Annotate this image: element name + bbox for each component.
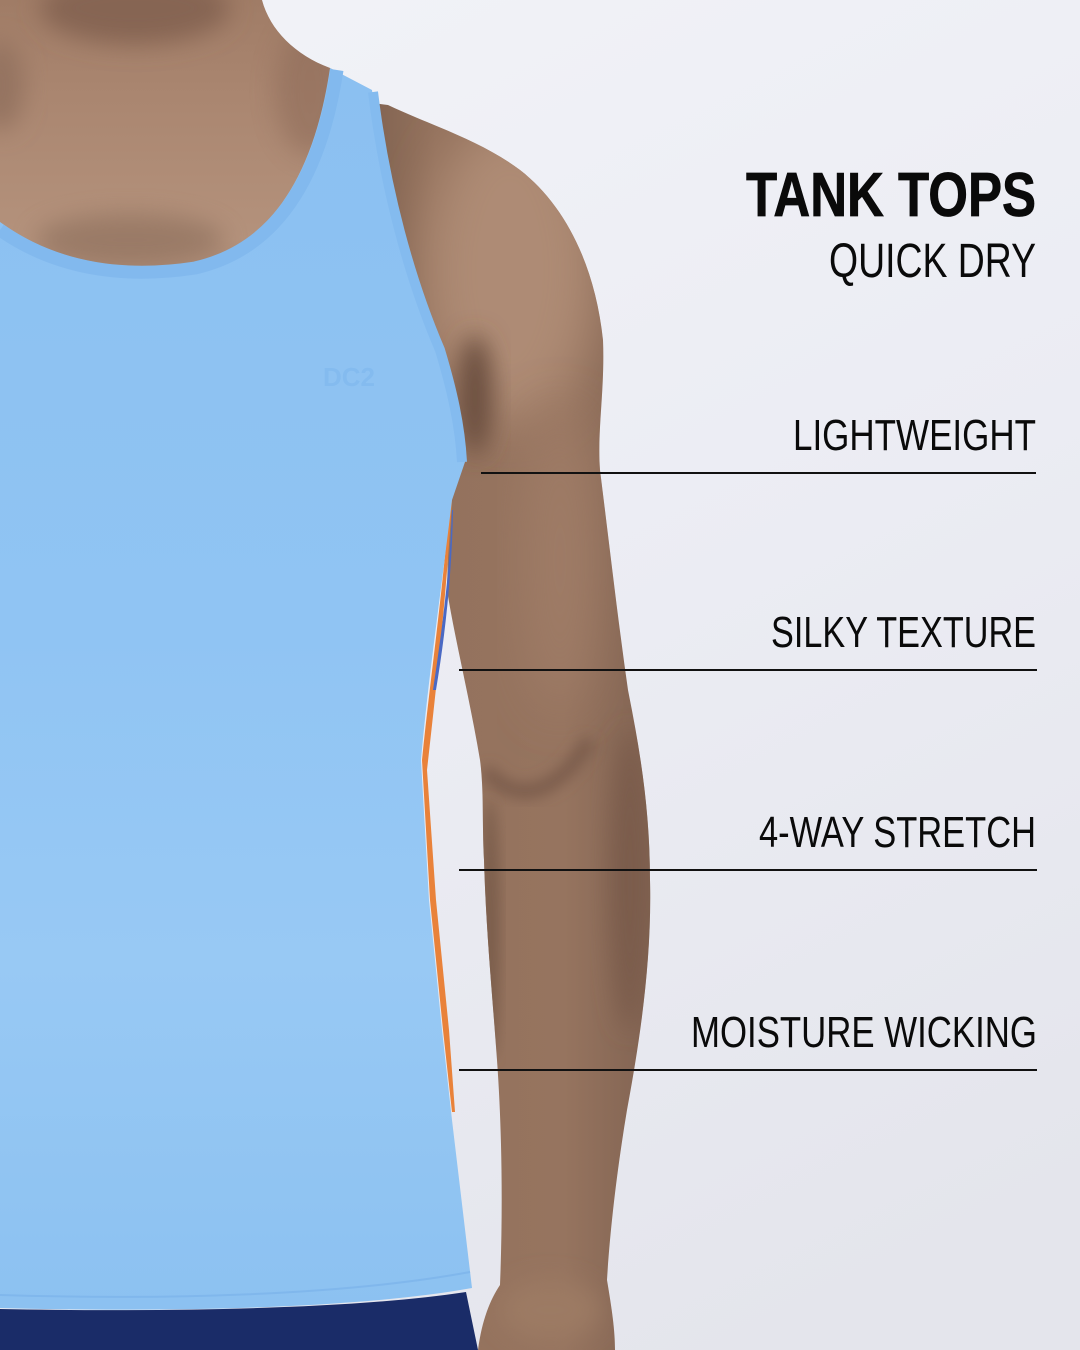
hem line — [0, 1272, 470, 1297]
arm and shoulder — [380, 104, 650, 1350]
armhole binding — [373, 92, 462, 462]
neckline binding — [0, 70, 337, 272]
logo: DC2 — [323, 362, 375, 392]
side piping blue — [433, 510, 453, 690]
side piping orange — [422, 500, 455, 1112]
shorts — [0, 1292, 478, 1350]
model figure — [0, 0, 660, 1350]
neck and chest skin — [0, 0, 332, 266]
tank top body — [0, 68, 472, 1310]
